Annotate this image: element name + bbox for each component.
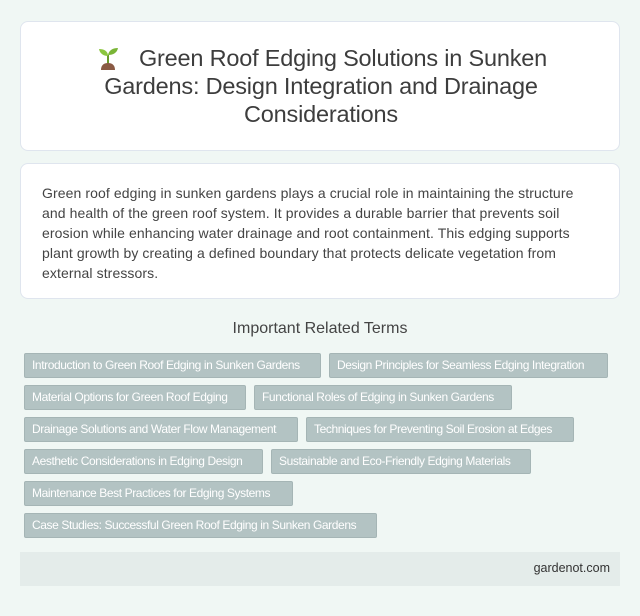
description text: Green roof edging in sunken gardens plays a crucial role in maintaining the structure [42, 185, 573, 201]
tag 1 [24, 353, 321, 378]
tag 2: Design Principles for Seamless Edging Integration [337, 358, 584, 372]
tag 5: Drainage Solutions and Water Flow Management [32, 422, 276, 436]
title: Gardens: Design Integration and Drainage [104, 73, 538, 99]
description text: erosion while enhancing water drainage and root containment. This edging supports [42, 225, 570, 241]
tag 10: Case Studies: Successful Green Roof Edging in Sunken Gardens [32, 518, 356, 532]
header card [20, 21, 620, 151]
tag 6: Techniques for Preventing Soil Erosion at Edges [314, 422, 552, 436]
footer text: gardenot.com [534, 561, 610, 575]
tag 10 [24, 513, 377, 538]
title [99, 45, 547, 127]
tag 3: Material Options for Green Roof Edging [32, 390, 228, 404]
tag 4 [254, 385, 512, 410]
tag 6 [306, 417, 574, 442]
tag 1: Introduction to Green Roof Edging in Sunken Gardens [32, 358, 300, 372]
title: Considerations [244, 101, 398, 127]
tag 3 [24, 385, 246, 410]
footer [20, 552, 620, 586]
tag 7: Aesthetic Considerations in Edging Design [32, 454, 242, 468]
title: Green Roof Edging Solutions in Sunken [139, 45, 547, 71]
tag 9: Maintenance Best Practices for Edging Systems [32, 486, 270, 500]
tag 8: Sustainable and Eco-Friendly Edging Materials [279, 454, 510, 468]
tag 2 [329, 353, 608, 378]
tag 7 [24, 449, 263, 474]
description text: and health of the green roof system. It provides a durable barrier that prevents soil [42, 205, 559, 221]
description text: plant growth by creating a defined boundary that protects delicate vegetation from [42, 245, 556, 261]
icon: seedling [99, 48, 118, 70]
description card [20, 163, 620, 299]
tag 5 [24, 417, 298, 442]
description text [42, 185, 573, 281]
tag 8 [271, 449, 531, 474]
tag 4: Functional Roles of Edging in Sunken Gardens [262, 390, 494, 404]
description text: external stressors. [42, 265, 158, 281]
tag 9 [24, 481, 293, 506]
section heading: Important Related Terms [233, 320, 407, 337]
